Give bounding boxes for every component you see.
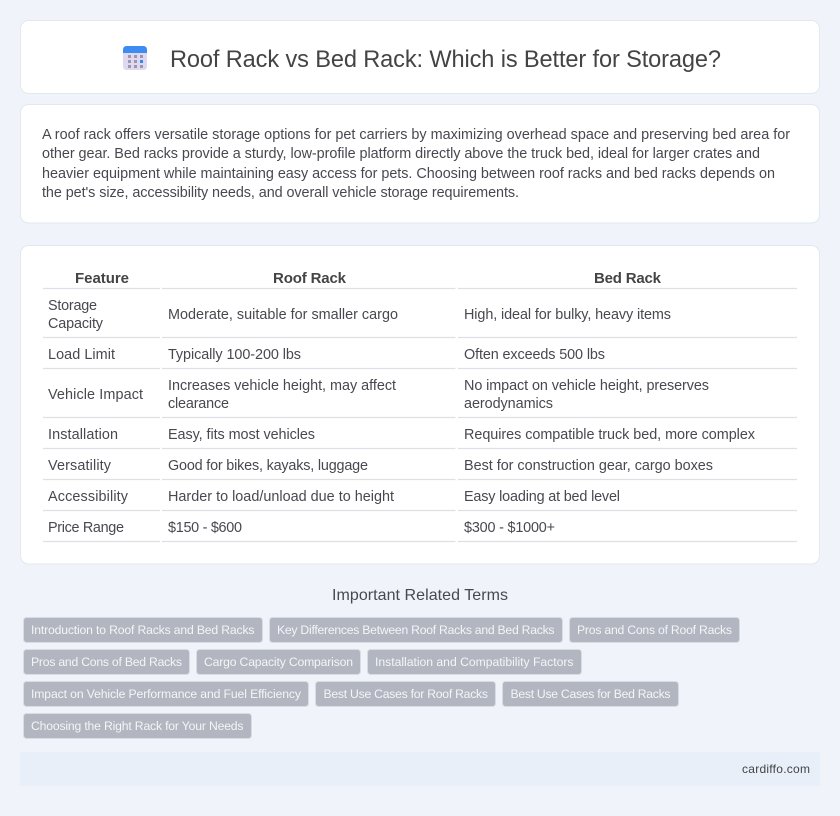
table row: storage capacity: High, ideal for bulky, heavy items [464, 307, 671, 323]
heading: important related terms: Important Related Terms [332, 587, 508, 604]
text block: summary paragraph: the pet's size, accessibility needs, and overall vehicle storage requirements. [42, 185, 519, 201]
tag: key differences [270, 618, 562, 642]
table header row [43, 270, 797, 288]
tag: cargo capacity [196, 650, 360, 674]
table row: storage capacity [43, 298, 797, 338]
text block: summary paragraph: heavier equipment while maintaining easy access for pets. Choosing between roof racks and bed racks depends on [42, 166, 775, 182]
table row: vehicle impact: No impact on vehicle height, preserves [464, 378, 709, 394]
tag: pros and cons of bed racks: Pros and Cons of Bed Racks [31, 655, 182, 669]
table row: versatility: Good for bikes, kayaks, luggage [168, 458, 368, 474]
tag: introduction [24, 618, 262, 642]
tag list: related terms [24, 618, 740, 738]
text block: summary paragraph [42, 127, 790, 201]
text block: summary paragraph: other gear. Bed racks provide a sturdy, low-profile platform directly above the truck bed, ideal for larger crates and [42, 146, 760, 162]
table row: price range [43, 520, 797, 542]
table row: vehicle impact [43, 378, 797, 418]
table row: accessibility: Easy loading at bed level [464, 489, 620, 505]
table row: accessibility: Accessibility [48, 489, 129, 505]
table header row: Feature [75, 270, 129, 287]
table row: price range: $300 - $1000+ [464, 520, 555, 536]
tag: best use roof racks: Best Use Cases for Roof Racks [324, 687, 488, 701]
table row: load limit [43, 347, 797, 368]
panel: comparison table [20, 246, 820, 564]
table row: installation [43, 427, 797, 448]
tag: pros and cons of roof racks [570, 618, 740, 642]
table row: storage capacity: Moderate, suitable for smaller cargo [168, 307, 398, 323]
table row: load limit: Often exceeds 500 lbs [464, 347, 605, 363]
tag: choosing the right rack [24, 714, 252, 738]
icon: calendar [123, 46, 147, 70]
table row: installation: Easy, fits most vehicles [168, 427, 315, 443]
table row: price range: $150 - $600 [168, 520, 242, 536]
table row: installation: Installation [48, 427, 118, 443]
tag: choosing the right rack: Choosing the Right Rack for Your Needs [31, 719, 244, 733]
tag: best use roof racks [316, 682, 496, 706]
tag: key differences: Key Differences Between Roof Racks and Bed Racks [277, 623, 554, 637]
table header row: Roof Rack [273, 270, 347, 287]
text block: summary paragraph: A roof rack offers versatile storage options for pet carriers by maximizing overhead space and preserving bed area for [42, 127, 790, 143]
table row: versatility: Best for construction gear, cargo boxes [464, 458, 713, 474]
tag: vehicle performance: Impact on Vehicle Performance and Fuel Efficiency [31, 687, 302, 701]
table row: accessibility [43, 489, 797, 510]
table header row: Bed Rack [594, 270, 662, 287]
table row: versatility [43, 458, 797, 480]
footer source credit: cardiffo.com [742, 762, 810, 776]
tag: pros and cons of roof racks: Pros and Cons of Roof Racks [577, 623, 732, 637]
table row: vehicle impact: clearance [168, 396, 229, 412]
table row: versatility: Versatility [48, 458, 112, 474]
tag: pros and cons of bed racks [24, 650, 190, 674]
table row: storage capacity: Capacity [48, 316, 104, 332]
tag: introduction: Introduction to Roof Racks and Bed Racks [31, 623, 254, 637]
table row: vehicle impact: Vehicle Impact [48, 387, 143, 403]
table row: storage capacity: Storage [48, 298, 97, 314]
tag: cargo capacity: Cargo Capacity Comparison [204, 655, 353, 669]
tag: vehicle performance [24, 682, 308, 706]
tag: installation and compatibility: Installation and Compatibility Factors [375, 655, 574, 669]
table row: load limit: Typically 100-200 lbs [168, 347, 301, 363]
table row: accessibility: Harder to load/unload due to height [168, 489, 394, 505]
tag: best use bed racks: Best Use Cases for Bed Racks [510, 687, 670, 701]
footer bar [20, 752, 820, 786]
table row: price range: Price Range [48, 520, 124, 536]
tag: installation and compatibility [368, 650, 582, 674]
title: Roof Rack vs Bed Rack: Which is Better for Storage? [170, 47, 721, 73]
table row: load limit: Load Limit [48, 347, 115, 363]
table row: installation: Requires compatible truck bed, more complex [464, 427, 756, 443]
tag: best use bed racks [502, 682, 678, 706]
panel: title header [20, 20, 820, 94]
table row: vehicle impact: aerodynamics [464, 396, 553, 412]
table row: vehicle impact: Increases vehicle height, may affect [168, 378, 396, 394]
panel: summary text [20, 104, 820, 223]
